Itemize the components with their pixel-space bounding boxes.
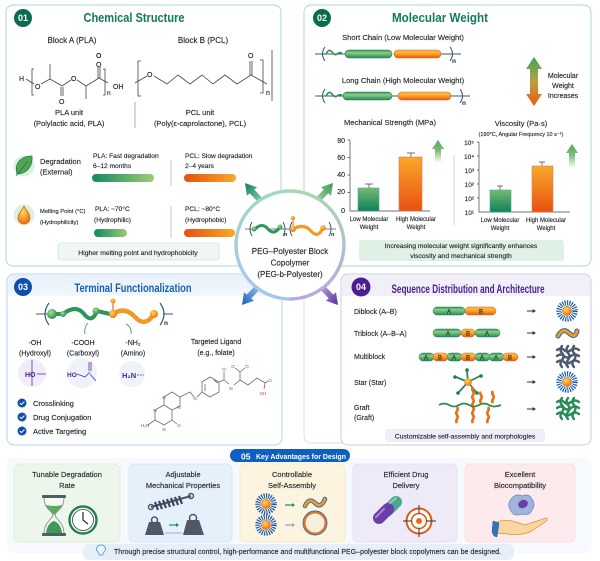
row: graft [354, 387, 579, 423]
viscosity chart: Weight [537, 226, 556, 232]
PLA degradation bar [92, 174, 154, 182]
arrow: to panel 01 [245, 183, 266, 206]
molecular weight increases label: Weight [552, 83, 574, 90]
viscosity chart: Low Molecular [481, 218, 519, 224]
mechanical strength chart: High Molecular [396, 217, 436, 223]
section heading pill: 05 [241, 452, 251, 462]
low MW viscosity bar [490, 190, 511, 212]
section heading pill: Key Advantages for Design [256, 454, 346, 461]
folate molecule [141, 364, 272, 432]
PLA melting text: PLA: ~70°C [95, 206, 130, 213]
icon: cell [509, 495, 534, 515]
card: excellent biocompatibility: Excellent [505, 470, 535, 479]
panel: 02 molecular weight [304, 5, 591, 266]
mechanical strength chart: Weight [407, 225, 426, 231]
PCL structural formula: n [266, 90, 270, 97]
PCL unit caption: (Poly(ε-caprolactone), PCL) [154, 119, 247, 128]
callout: melting point [58, 243, 219, 260]
mechanical strength chart [337, 118, 436, 231]
row: multiblock: B [508, 356, 512, 362]
row: multiblock: Multiblock [354, 354, 386, 361]
block B label: Block B (PCL) [178, 36, 228, 45]
row: triblock: Triblock (A–B–A) [354, 331, 407, 338]
PLA structural formula [19, 53, 124, 106]
icon: hydroxyl structure: HO [25, 372, 36, 379]
low MW bar [358, 188, 379, 211]
icon: worm and vesicle [303, 499, 327, 535]
callout: MW effect: viscosity and mechanical strength [410, 253, 512, 260]
checklist: Active Targeting [33, 427, 86, 436]
badge 03 [14, 278, 32, 296]
row: star [354, 368, 575, 395]
long chain label: Long Chain (High Molecular Weight) [342, 76, 465, 85]
summary pill [83, 544, 514, 560]
arrow: to panel 03 [242, 282, 263, 305]
PCL unit caption: PCL unit [186, 108, 214, 117]
row: multiblock: B [466, 356, 470, 362]
central chain: n [331, 232, 335, 238]
badge 02: 02 [317, 13, 327, 23]
PLA melting bar [94, 229, 127, 237]
mechanical strength chart: Mechanical Strength (MPa) [344, 118, 436, 127]
copolymer chain with functional groups [36, 298, 173, 334]
PCL melting text: PCL: ~80°C [185, 206, 220, 213]
viscosity chart: Viscosity (Pa·s) [495, 119, 548, 128]
panel: 04 sequence distribution and architecture [304, 268, 591, 445]
icon: oil drop [14, 204, 34, 226]
viscosity chart [464, 119, 570, 232]
arrow: viscosity up [566, 144, 578, 168]
row: triblock [354, 329, 577, 338]
PCL degradation text: 2–4 years [185, 163, 215, 170]
icon: micelles and arrows [258, 496, 295, 533]
card: controllable self-assembly: Self-Assembly [268, 481, 316, 490]
viscosity chart: 10² [465, 196, 475, 203]
card: tunable degradation: Tunable Degradation [32, 470, 102, 479]
PCL degradation bar [184, 174, 236, 182]
heading: chemical structure: Chemical Structure [84, 11, 185, 25]
double arrow: molecular weight increases [526, 57, 542, 106]
badge 03: 03 [18, 282, 28, 292]
viscosity chart: 10⁴ [464, 154, 474, 161]
mechanical strength chart: Weight [360, 225, 379, 231]
card: adjustable mechanical properties: Adjustable [165, 470, 201, 479]
card: excellent biocompatibility [465, 464, 575, 542]
folate molecule: O [222, 367, 226, 372]
PLA unit caption: (Polylactic acid, PLA) [34, 119, 105, 128]
row: multiblock: A [452, 356, 456, 362]
badge 01 [14, 9, 32, 27]
central chain: n [284, 232, 288, 238]
carboxyl label: -COOH [71, 340, 95, 347]
hydroxyl label: (Hydroxyl) [19, 350, 51, 358]
central label: Copolymer [271, 258, 310, 268]
row: multiblock: A [424, 356, 428, 362]
callout: melting point: Higher melting point and hydrophobicity [78, 250, 198, 257]
mechanical strength chart: 80 [337, 138, 345, 145]
central copolymer circle [236, 191, 344, 299]
badge 02 [313, 9, 331, 27]
PLA degradation text: PLA: Fast degradation [93, 153, 159, 160]
icon: amino structure [119, 361, 145, 387]
central chain [245, 216, 336, 238]
row: graft: (Graft) [354, 415, 374, 422]
folate molecule: N [162, 395, 166, 400]
mechanical strength chart: 60 [337, 155, 345, 162]
row: graft: Graft [354, 405, 370, 412]
icon: lightbulb [97, 545, 105, 555]
section heading pill [230, 449, 350, 462]
icon: carboxyl structure [67, 358, 97, 388]
row: diblock: Diblock (A–B) [354, 309, 397, 316]
panel: 03 terminal functionalization [7, 274, 282, 445]
row: diblock [354, 303, 575, 319]
row: diblock: A [447, 310, 451, 316]
PLA structural formula: O [96, 62, 102, 69]
short chain diagram: n [452, 58, 456, 65]
row: triblock: A [446, 332, 450, 338]
checklist: Crosslinking [33, 399, 74, 408]
summary pill: Through precise structural control, high-performance and multifunctional PEG–polyester block copolymers can be designed. [114, 549, 501, 556]
card: adjustable mechanical properties: Mechanical Properties [146, 481, 220, 490]
panel: 01 chemical structure [6, 5, 281, 266]
icon: hydroxyl structure [18, 359, 46, 387]
callout: self-assembly: Customizable self-assembly and morphologies [395, 434, 536, 440]
folate molecule: N [162, 427, 166, 432]
viscosity chart: (190°C, Angular Frequency 10 s⁻¹) [479, 132, 564, 138]
mechanical strength chart: 0 [341, 208, 345, 215]
icon: weights [145, 514, 204, 535]
icon: hand [492, 518, 547, 537]
viscosity chart: 10³ [465, 168, 475, 175]
PCL melting text: (Hydrophobic) [185, 217, 226, 224]
card: controllable self-assembly: Controllable [272, 470, 312, 479]
callout: MW effect: Increasing molecular weight significantly enhances [385, 243, 537, 250]
long chain diagram: n [462, 100, 466, 107]
PLA structural formula: O [59, 99, 65, 106]
melting point label: (Hydrophilicity) [40, 220, 78, 226]
PLA melting text: (Hydrophilic) [94, 217, 131, 224]
folate molecule: OH [260, 391, 266, 396]
row: triblock: A [485, 332, 489, 338]
card: efficient drug delivery [353, 464, 457, 542]
PCL degradation text: PCL: Slow degradation [185, 153, 252, 160]
card: efficient drug delivery: Delivery [392, 481, 420, 490]
folate molecule: O [268, 378, 272, 383]
row: triblock: B [466, 332, 470, 338]
short chain label: Short Chain (Low Molecular Weight) [342, 33, 464, 42]
viscosity chart: High Molecular [526, 218, 566, 224]
amino label: (Amino) [121, 350, 145, 358]
icon: hourglass [42, 495, 66, 536]
icon: amino structure: H₂N [122, 371, 136, 380]
viscosity chart: Weight [491, 226, 510, 232]
melting point label: Melting Point (°C) [40, 209, 86, 215]
folate molecule: O [231, 364, 235, 369]
viscosity chart: 10⁵ [464, 140, 474, 147]
arrow: strength up [432, 140, 444, 163]
badge 04: 04 [356, 282, 366, 292]
folate molecule: N [193, 396, 197, 401]
PLA unit caption: PLA unit [55, 108, 83, 117]
icon: carboxyl structure: HO [67, 372, 77, 379]
central label: PEG–Polyester Block [252, 247, 328, 256]
card: efficient drug delivery: Efficient Drug [384, 470, 428, 479]
folate molecule: O [177, 423, 181, 428]
icon: capsule [376, 498, 396, 518]
PLA structural formula: H [19, 76, 24, 83]
row: multiblock [354, 346, 579, 367]
card: adjustable mechanical properties [129, 464, 232, 542]
row: multiblock: A [494, 356, 498, 362]
card: tunable degradation: Rate [59, 481, 75, 490]
card: tunable degradation [14, 464, 120, 542]
PLA structural formula: O [71, 76, 77, 83]
amino label: -NH₂ [125, 340, 141, 347]
hydroxyl label: -OH [29, 340, 41, 347]
PCL structural formula [135, 50, 272, 101]
viscosity chart: 10² [465, 182, 475, 189]
folate molecule: O [245, 364, 249, 369]
PCL melting bar [184, 229, 235, 237]
panel: 05 key advantages [7, 449, 592, 560]
PLA degradation text: 6–12 months [93, 163, 132, 170]
mechanical strength chart: 20 [337, 189, 345, 196]
row: multiblock: A [480, 356, 484, 362]
degradation label: Degradation [40, 157, 81, 166]
PLA structural formula: O [35, 84, 41, 91]
heading: molecular weight: Molecular Weight [392, 11, 489, 25]
molecular weight increases label: Molecular [548, 73, 578, 80]
badge 01: 01 [18, 13, 28, 23]
card: excellent biocompatibility: Biocompatibility [494, 481, 546, 490]
viscosity chart: 10¹ [465, 210, 475, 217]
carboxyl label: (Carboxyl) [67, 350, 99, 358]
block A label: Block A (PLA) [48, 36, 97, 45]
mechanical strength chart: Low Molecular [350, 217, 388, 223]
high MW bar [399, 157, 422, 211]
PLA structural formula: O [96, 53, 102, 60]
folate molecule: N [229, 386, 233, 391]
row: diblock: B [479, 310, 483, 316]
badge 04 [352, 278, 370, 296]
copolymer chain with functional groups: n [164, 320, 168, 327]
callout: MW effect [359, 240, 564, 261]
molecular weight increases label: Increases [548, 93, 579, 100]
row: star: Star (Star) [354, 380, 386, 387]
arrow: to panel 04 [317, 282, 338, 305]
heading: terminal functionalization: Terminal Functionalization [74, 281, 192, 295]
targeted ligand label: (e.g., folate) [197, 350, 235, 357]
PLA structural formula: n [107, 90, 111, 97]
checklist [18, 398, 91, 436]
short chain diagram [315, 47, 461, 65]
folate molecule: N [177, 405, 181, 410]
folate molecule: H₂N [141, 423, 149, 428]
folate molecule: N [153, 408, 157, 413]
degradation label: (External) [40, 168, 73, 176]
high MW viscosity bar [532, 166, 553, 212]
callout: self-assembly [385, 429, 545, 442]
PCL structural formula: O [147, 72, 153, 79]
icon: clock [70, 506, 96, 534]
PCL structural formula: O [248, 53, 254, 60]
icon: leaf [14, 156, 34, 176]
card: controllable self-assembly [240, 464, 345, 542]
icon: target [403, 505, 436, 537]
mechanical strength chart: 40 [337, 172, 345, 179]
PLA structural formula: OH [113, 84, 124, 91]
checklist: Drug Conjugation [33, 413, 91, 422]
icon: spring [148, 494, 194, 510]
arrow: to panel 02 [312, 183, 333, 206]
row: multiblock: B [438, 356, 442, 362]
central label: (PEG-b-Polyester) [257, 270, 323, 279]
targeted ligand label: Targeted Ligand [191, 339, 241, 346]
long chain diagram [315, 89, 470, 107]
